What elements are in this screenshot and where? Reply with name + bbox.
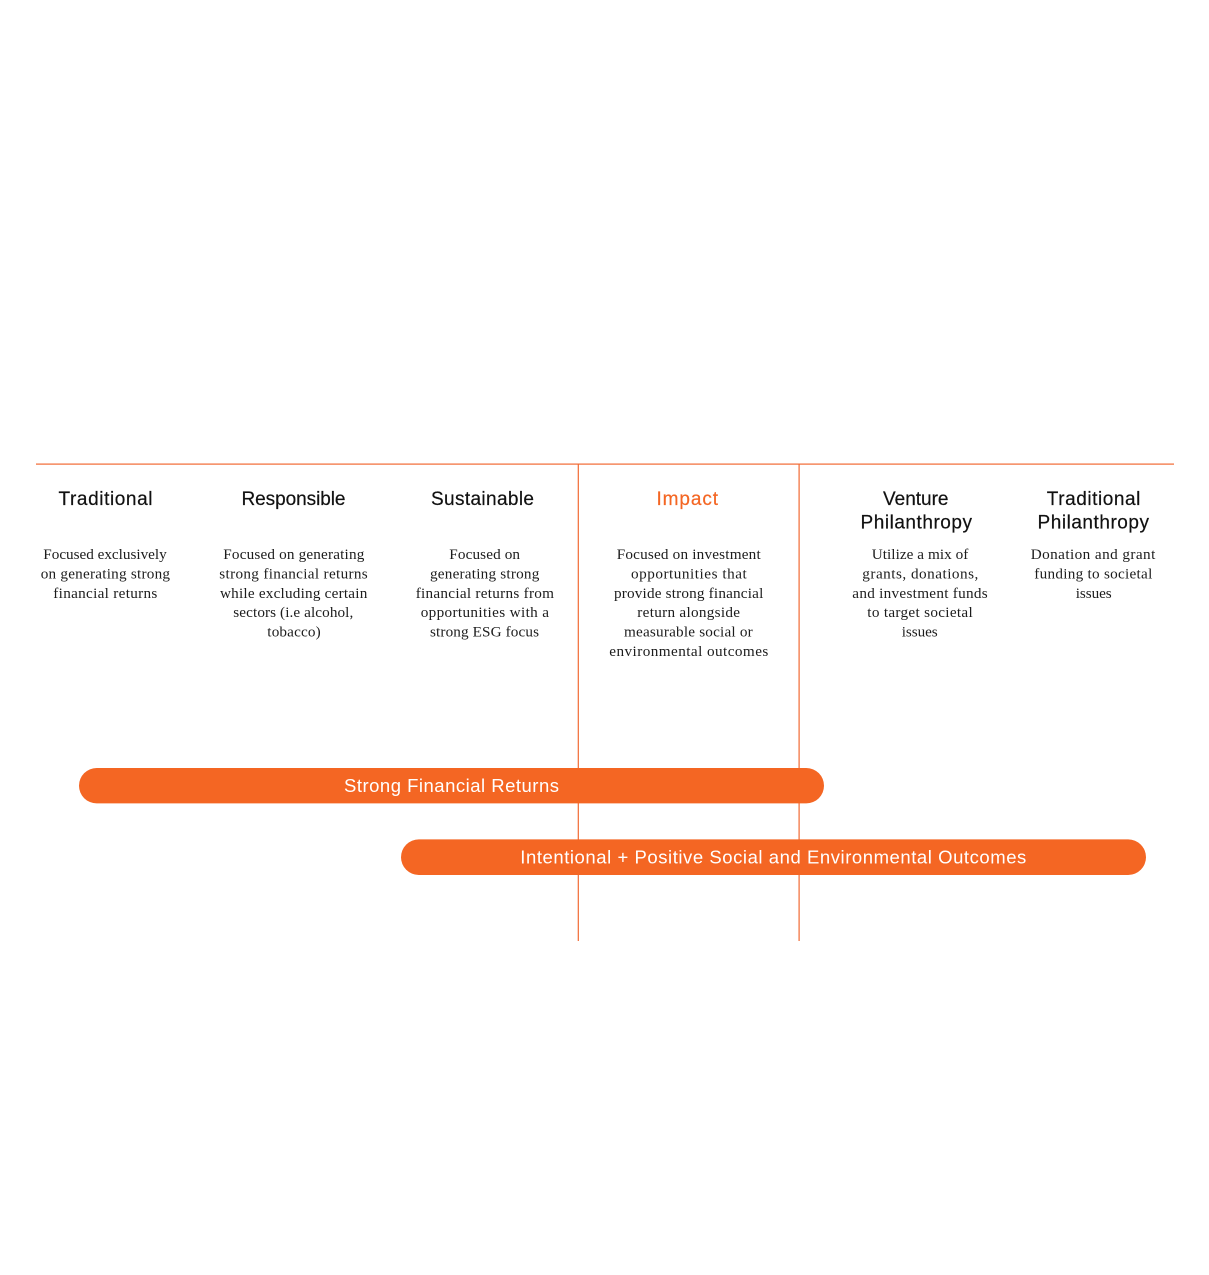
text: Traditional Philanthropy description: Donation and grant [1031,546,1156,563]
text: Venture Philanthropy description: grants, donations, [862,566,978,582]
text: Impact description: return alongside [637,604,740,621]
Impact column dividers [578,464,800,941]
text: Traditional Philanthropy description: funding to societal [1034,566,1152,582]
text: Sustainable description: generating strong [430,566,540,582]
panel: Traditional Philanthropy [1031,489,1156,602]
panel: Responsible [219,489,368,640]
text: Responsible description [219,546,368,640]
bar: Strong Financial Returns [79,768,824,803]
text: Traditional Philanthropy description: issues [1076,585,1112,602]
text: Sustainable description: strong ESG focus [430,624,539,640]
bar: Intentional + Positive Social and Environmental Outcomes: Intentional + Positive Social and Environmental Outcomes [520,846,1026,867]
top rule [36,464,1174,465]
text: Sustainable description: financial returns from [416,585,554,602]
text: Responsible description: Focused on generating [223,546,365,563]
heading: Traditional Philanthropy [1038,489,1150,533]
heading: Traditional: Traditional [58,489,152,510]
text: Sustainable description: opportunities with a [421,604,549,621]
heading: Traditional Philanthropy: Philanthropy [1038,512,1150,533]
panel: Traditional [41,489,170,602]
heading: Venture Philanthropy: Philanthropy [860,512,972,533]
text: Traditional Philanthropy description [1031,546,1156,602]
bar: Strong Financial Returns: Strong Financial Returns [344,775,559,796]
heading: Venture Philanthropy [860,489,972,533]
text: Responsible description: sectors (i.e alcohol, [233,604,353,621]
text: Venture Philanthropy description: to target societal [867,604,973,621]
text: Impact description: provide strong financial [614,585,763,602]
text: Venture Philanthropy description: and investment funds [852,585,988,602]
text: Venture Philanthropy description [852,546,988,640]
bar: Intentional + Positive Social and Environmental Outcomes [401,839,1146,875]
text: Impact description: Focused on investment [617,546,761,563]
text: Responsible description: strong financial returns [219,566,368,582]
text: Responsible description: while excluding certain [220,585,368,602]
text: Impact description: opportunities that [631,566,747,582]
panel: Impact [609,489,768,660]
text: Sustainable description [416,546,554,640]
heading: Impact: Impact [656,489,719,510]
panel: Sustainable [416,489,554,640]
panel: Venture Philanthropy [852,489,988,640]
text: Traditional description [41,546,170,602]
text: Impact description [609,546,768,660]
text: Traditional description: Focused exclusively [43,546,167,563]
heading: Responsible: Responsible [242,489,346,510]
heading: Sustainable: Sustainable [431,489,534,510]
text: Impact description: measurable social or [624,624,753,640]
heading: Venture Philanthropy: Venture [883,489,948,510]
heading: Traditional Philanthropy: Traditional [1047,489,1140,510]
text: Sustainable description: Focused on [449,546,520,563]
text: Impact description: environmental outcomes [609,643,768,660]
text: Traditional description: on generating strong [41,566,170,582]
text: Venture Philanthropy description: Utilize a mix of [872,546,969,563]
text: Traditional description: financial returns [53,585,157,602]
text: Venture Philanthropy description: issues [902,624,938,640]
text: Responsible description: tobacco) [267,624,321,640]
